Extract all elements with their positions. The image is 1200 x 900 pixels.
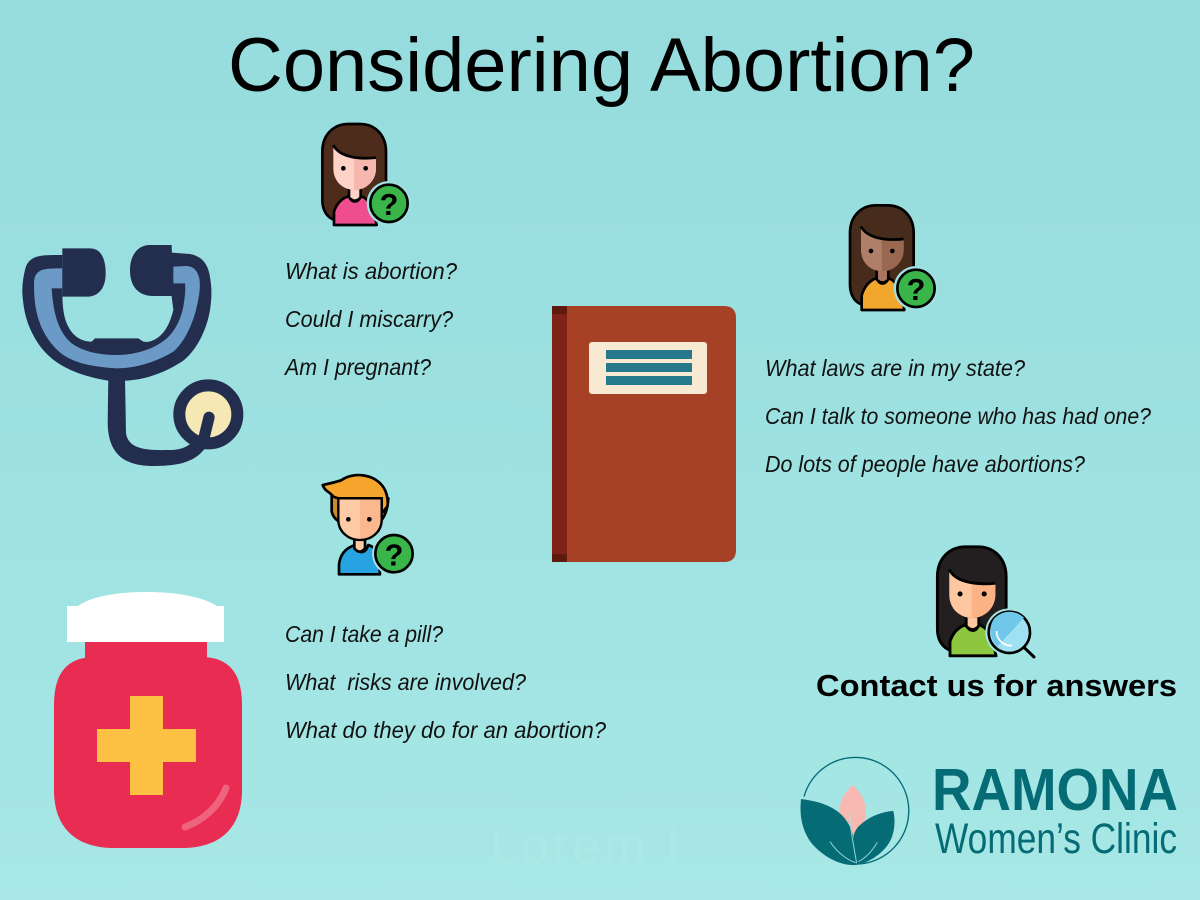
logo mark — [801, 757, 909, 865]
text block: questions bottom left: Can I take a pill? — [285, 621, 443, 647]
text block: questions right — [765, 355, 1151, 477]
icon: question badge: ? — [385, 538, 403, 572]
text block: questions right: Can I talk to someone who has had one? — [765, 403, 1151, 429]
text block: questions top left: What is abortion? — [285, 258, 457, 284]
icon: man with question badge — [323, 475, 416, 576]
icon: book — [552, 306, 736, 562]
icon: question badge: ? — [907, 273, 925, 307]
title: Considering Abortion? — [228, 23, 975, 108]
icon: woman with question badge, orange top — [850, 205, 938, 311]
text block: questions top left: Am I pregnant? — [283, 354, 431, 380]
icon: magnifying glass — [985, 608, 1034, 657]
text block: questions right: What laws are in my state? — [765, 355, 1025, 381]
text block: questions right: Do lots of people have abortions? — [765, 451, 1085, 477]
text block: questions bottom left: What do they do for an abortion? — [285, 717, 606, 743]
icon: question badge: ? — [380, 188, 398, 222]
icon: woman with question badge, pink top — [322, 124, 411, 226]
text block: questions bottom left: What risks are involved? — [285, 669, 526, 695]
text block: questions top left: Could I miscarry? — [285, 306, 453, 332]
logo wordmark: RAMONA — [932, 757, 1178, 823]
faint background word: Lorem I — [490, 818, 680, 874]
logo: Ramona Women's Clinic — [801, 757, 1178, 865]
icon: medicine bottle — [54, 592, 242, 848]
text block: questions bottom left — [285, 621, 606, 743]
icon: woman with magnifying glass — [937, 547, 1034, 657]
icon: stethoscope — [22, 245, 237, 466]
call to action: Contact us for answers — [816, 668, 1177, 703]
text block: questions top left — [283, 258, 457, 380]
